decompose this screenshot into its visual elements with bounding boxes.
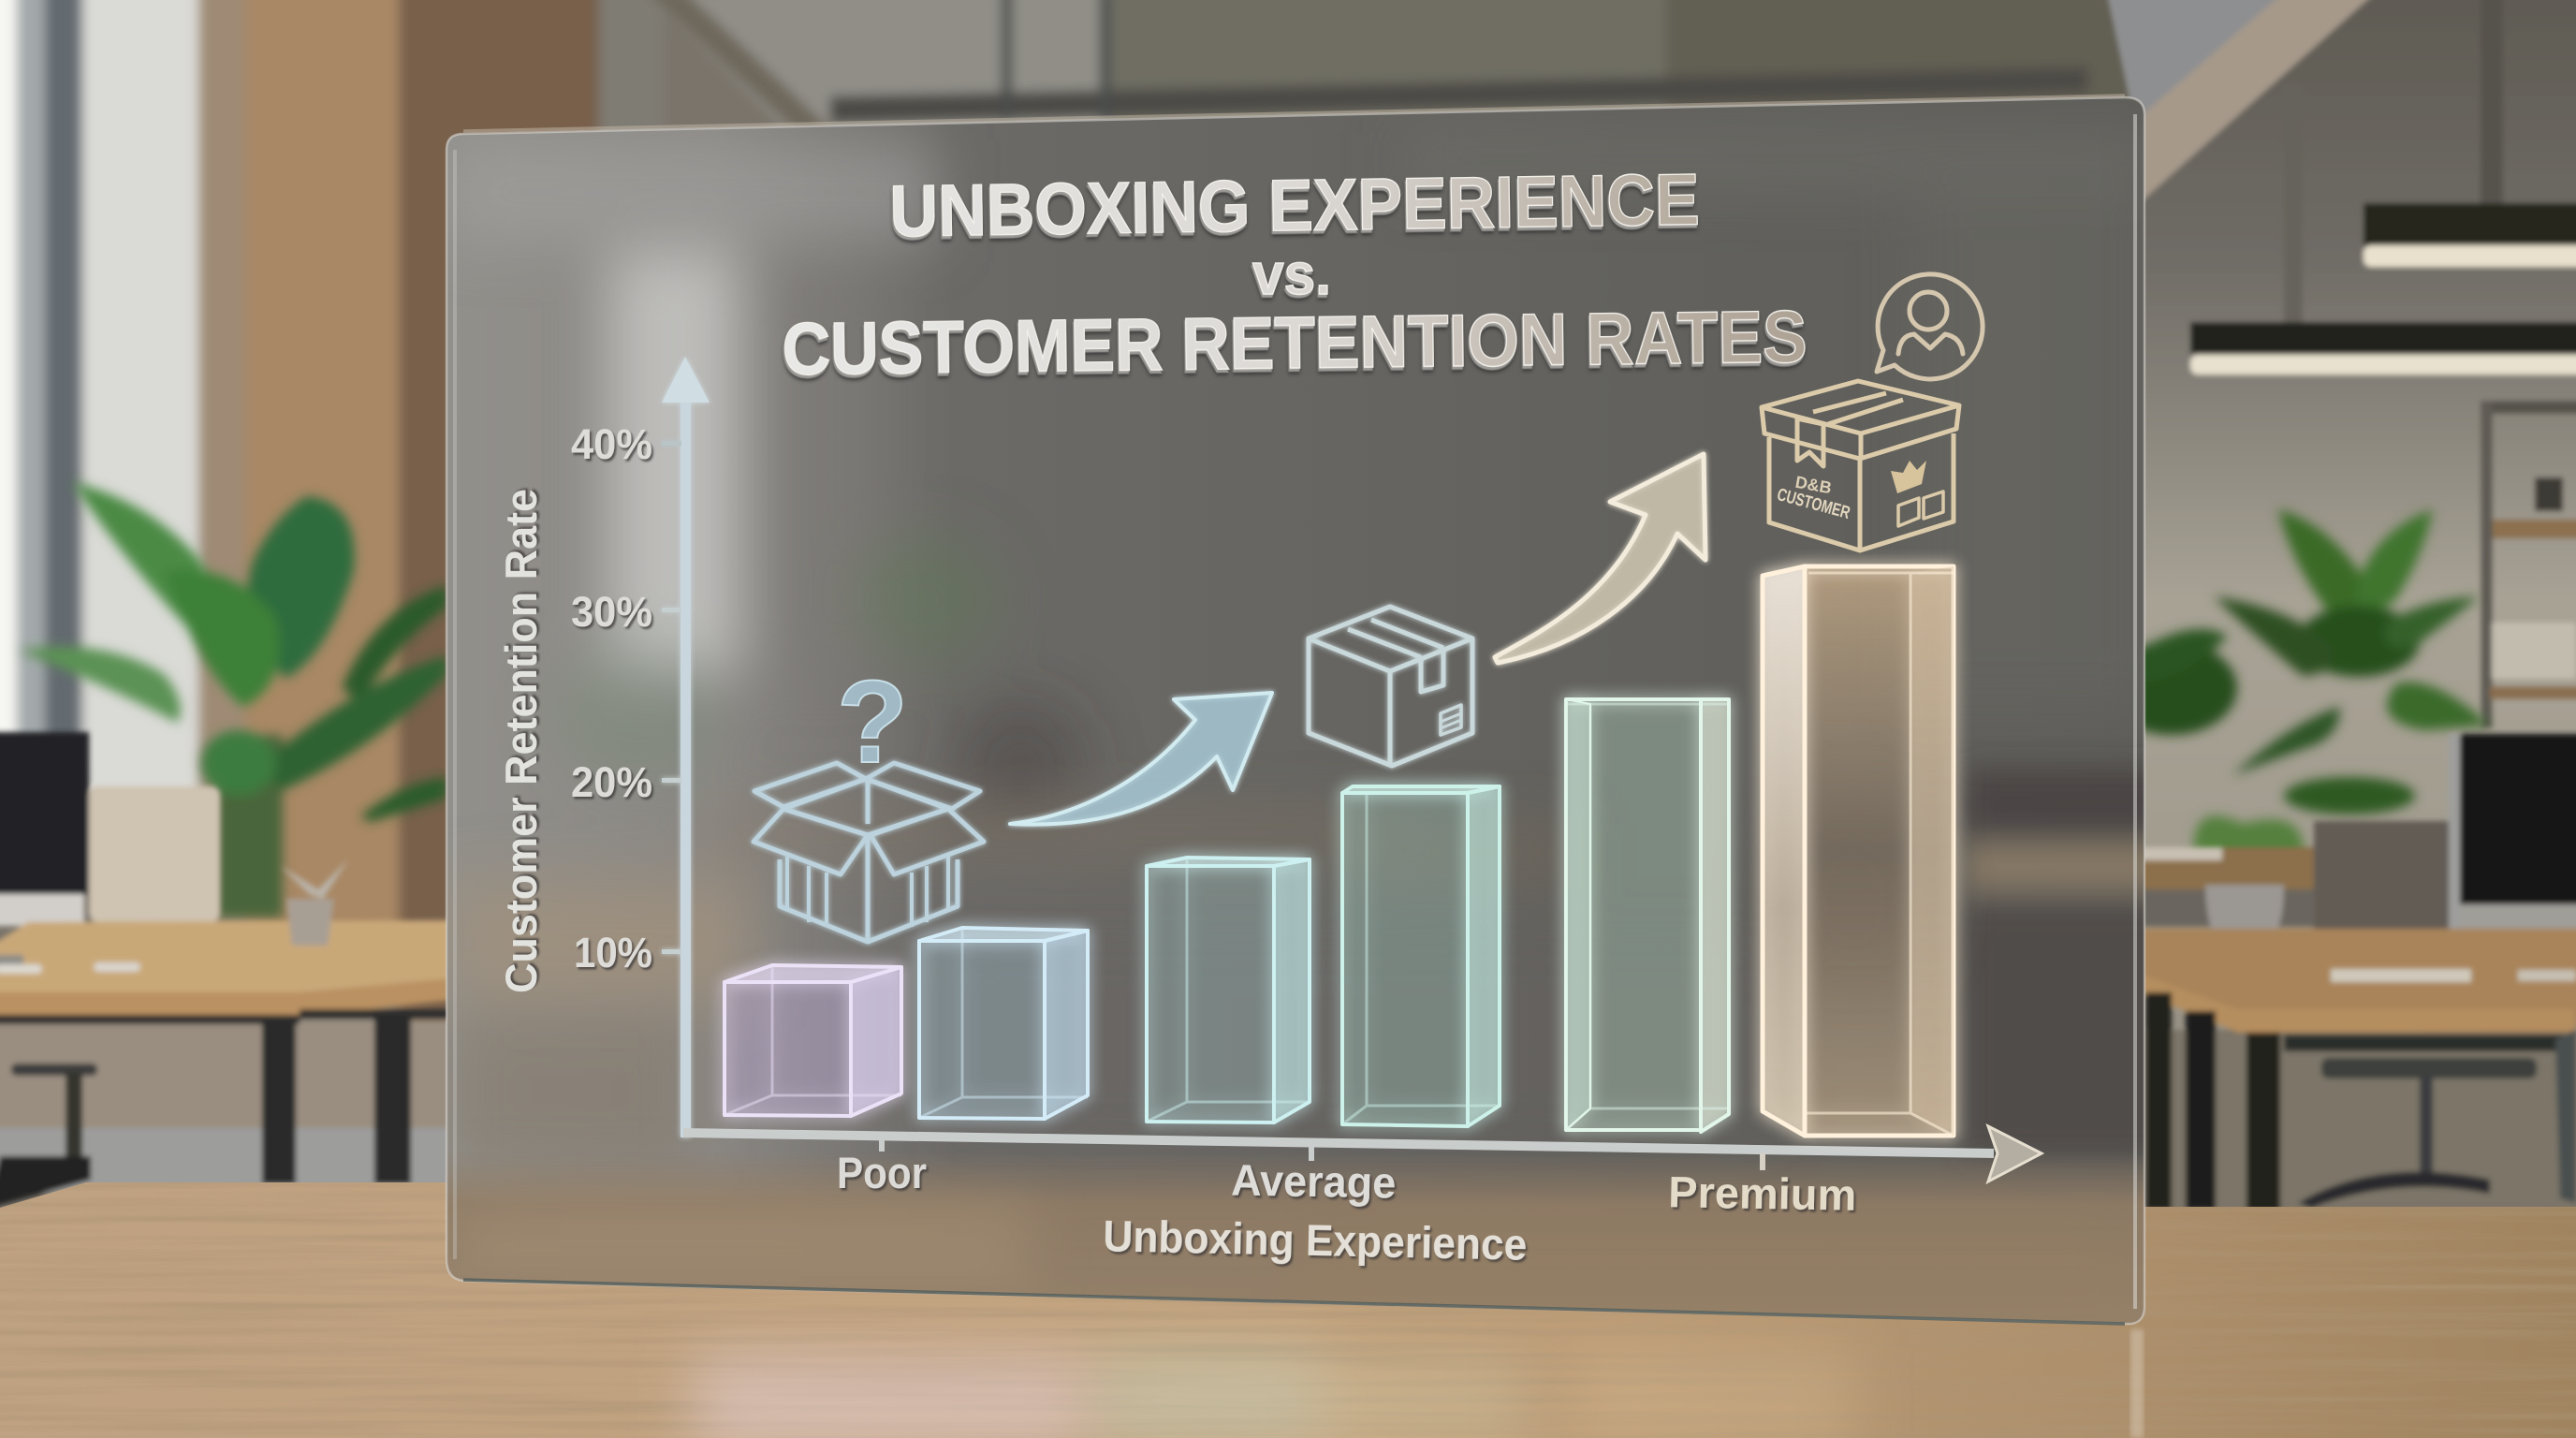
bar 5: premium, mint	[1566, 699, 1729, 1132]
40 percent: 40%	[571, 420, 652, 468]
x axis category labels	[837, 1148, 1857, 1220]
bar 6: premium, gold	[1763, 566, 1954, 1136]
label: Poor: Poor	[837, 1148, 927, 1197]
icon: crown	[1891, 461, 1926, 493]
title	[782, 158, 1808, 390]
arrow: blue growth arrow	[1010, 693, 1272, 825]
bar 3: average, aqua	[1147, 858, 1310, 1123]
reflection of the panel on the table	[693, 1348, 1853, 1438]
bars group	[724, 566, 1954, 1136]
icon: open box	[754, 763, 984, 942]
x axis title: Unboxing Experience	[1103, 1211, 1528, 1269]
left plant and desk	[19, 482, 447, 917]
x axis with arrow and ticks	[683, 1126, 2042, 1181]
icon: premium box: CUSTOMER	[1775, 485, 1852, 523]
box label: D&B	[1793, 473, 1833, 497]
icon: premium box	[1762, 381, 1959, 550]
lower table seen through the glass	[440, 1152, 2153, 1329]
y axis title: Customer Retention Rate	[496, 489, 546, 993]
icon: question mark above open box: ?	[837, 657, 908, 787]
wooden table top	[0, 1181, 2576, 1438]
y axis value labels	[571, 420, 652, 976]
bar 1: poor, lilac	[724, 965, 901, 1116]
right plants	[2106, 509, 2490, 880]
label: Premium: Premium	[1668, 1167, 1857, 1220]
frosted glass panel	[440, 94, 2162, 1329]
title line 2: vs.: vs.	[1252, 242, 1331, 307]
title line 1: UNBOXING EXPERIENCE	[889, 158, 1700, 252]
title line 3: CUSTOMER RETENTION RATES	[782, 294, 1808, 390]
bar 4: average, teal	[1342, 786, 1500, 1126]
10 percent: 10%	[574, 929, 652, 976]
y axis with arrow and ticks	[662, 357, 710, 1137]
bar 2: poor, blue	[919, 928, 1088, 1119]
icon: closed box	[1309, 607, 1472, 766]
label: Average: Average	[1231, 1154, 1397, 1208]
30 percent: 30%	[571, 588, 652, 636]
arrow: tan growth arrow	[1495, 454, 1705, 663]
icon: customer speech bubble	[1877, 274, 1983, 379]
20 percent: 20%	[571, 758, 652, 806]
